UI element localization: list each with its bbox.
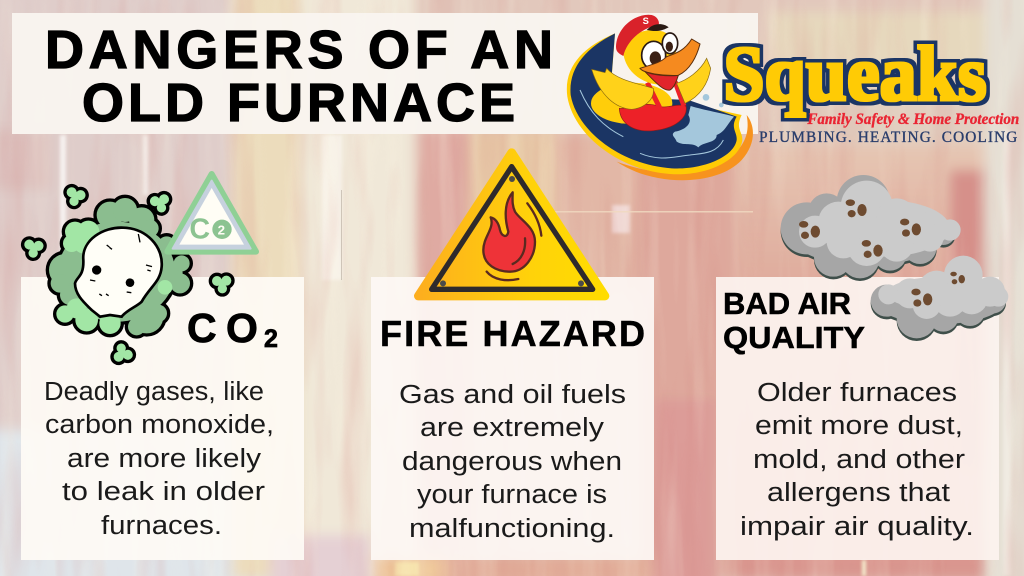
icon: skull in green gas bbox=[22, 174, 256, 363]
heading: CO2: C bbox=[187, 305, 217, 351]
heading: bad air quality bbox=[723, 286, 865, 355]
panel: CO2 bbox=[21, 277, 304, 560]
text block: bad air quality: emit more dust, bbox=[755, 412, 963, 440]
droplets bbox=[703, 94, 709, 101]
text block: CO2 bbox=[44, 378, 274, 540]
panel: bad air quality bbox=[716, 277, 999, 560]
icon: dust clouds bbox=[781, 175, 1008, 341]
text block: CO2: furnaces. bbox=[101, 512, 222, 540]
wings bbox=[592, 68, 653, 109]
text block: fire hazard bbox=[399, 381, 626, 543]
text block: fire hazard: malfunctioning. bbox=[409, 515, 615, 543]
text block: CO2: are more likely bbox=[67, 445, 261, 473]
duck body bbox=[591, 83, 672, 124]
text block: fire hazard: your furnace is bbox=[417, 481, 607, 509]
text block: CO2: Deadly gases, like bbox=[44, 378, 264, 406]
logo: Squeaks duck bbox=[567, 15, 1019, 180]
title panel bbox=[12, 13, 758, 134]
text block: CO2: carbon monoxide, bbox=[45, 411, 274, 439]
beak bbox=[640, 39, 700, 75]
logo: Squeaks duck: S bbox=[643, 16, 649, 26]
text block: fire hazard: are extremely bbox=[420, 414, 604, 442]
text block: bad air quality: impair air quality. bbox=[740, 513, 974, 541]
title bbox=[45, 20, 553, 133]
cap bbox=[616, 15, 659, 56]
head bbox=[623, 30, 676, 85]
heading: CO2: O bbox=[226, 305, 258, 351]
water splash bbox=[567, 33, 742, 174]
heading: fire hazard: FIRE HAZARD bbox=[380, 313, 645, 354]
text block: bad air quality: mold, and other bbox=[753, 446, 966, 474]
text block: CO2: to leak in older bbox=[62, 478, 266, 506]
text block: fire hazard: Gas and oil fuels bbox=[399, 381, 626, 409]
icon: skull in green gas: C bbox=[189, 214, 210, 246]
Squeaks wordmark: Squeaks bbox=[723, 30, 987, 117]
text block: fire hazard: dangerous when bbox=[402, 448, 622, 476]
orange swoosh bbox=[617, 115, 753, 180]
text block: bad air quality: allergens that bbox=[767, 479, 950, 507]
title: OLD FURNACE bbox=[82, 73, 515, 133]
text block: bad air quality: Older furnaces bbox=[757, 379, 957, 407]
heading: bad air quality: BAD AIR bbox=[723, 286, 851, 321]
panel: fire hazard bbox=[371, 277, 654, 560]
text block: bad air quality bbox=[740, 379, 974, 541]
services line: PLUMBING. HEATING. COOLING bbox=[759, 129, 1017, 146]
icon: skull in green gas: 2 bbox=[218, 223, 225, 238]
heading: bad air quality: QUALITY bbox=[723, 320, 865, 355]
icon: fire warning sign bbox=[418, 153, 605, 296]
eyes bbox=[642, 41, 666, 69]
heading: CO2: 2 bbox=[264, 325, 278, 353]
title: DANGERS OF AN bbox=[45, 20, 553, 80]
